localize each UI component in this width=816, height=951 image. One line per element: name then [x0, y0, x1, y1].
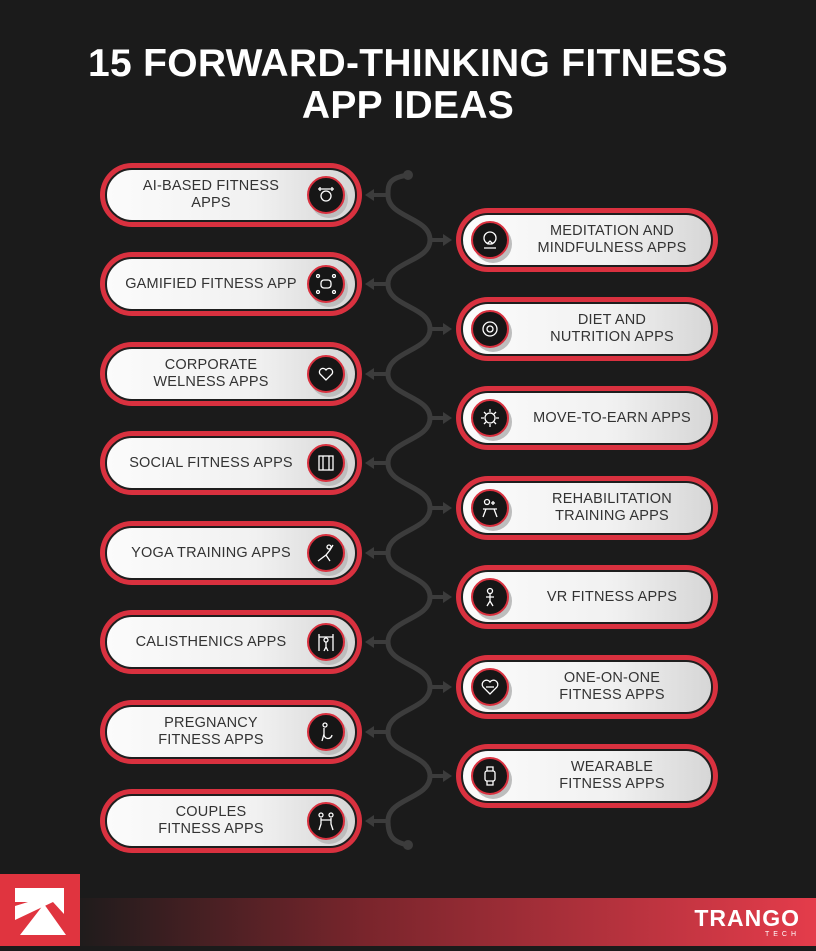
- pill: couples fitness apps: [100, 789, 362, 853]
- pill: corporate welness apps: CORPORATE: [165, 357, 257, 373]
- pill: rehabilitation training apps: [456, 476, 718, 540]
- pill: diet and nutrition apps: NUTRITION APPS: [550, 329, 674, 345]
- pill: couples fitness apps: COUPLES: [176, 804, 246, 820]
- pill: AI-based fitness apps: APPS: [191, 195, 231, 211]
- pill: rehabilitation training apps: TRAINING APPS: [555, 508, 669, 524]
- pill: social fitness apps: SOCIAL FITNESS APPS: [129, 454, 293, 470]
- pill: AI-based fitness apps: [100, 163, 362, 227]
- pill: wearable fitness apps: WEARABLE: [571, 759, 653, 775]
- pill: yoga training apps: [100, 521, 362, 585]
- pill: VR fitness apps: VR FITNESS APPS: [547, 588, 677, 604]
- pill: pregnancy fitness apps: [100, 700, 362, 764]
- title: 15 FORWARD-THINKING FITNESS: [88, 42, 728, 85]
- pill: corporate welness apps: [100, 342, 362, 406]
- pill: calisthenics apps: [100, 610, 362, 674]
- pill: VR fitness apps: [456, 565, 718, 629]
- title: APP IDEAS: [302, 84, 514, 127]
- pill: diet and nutrition apps: DIET AND: [578, 312, 646, 328]
- title: [88, 42, 728, 127]
- pill: one-on-one fitness apps: [456, 655, 718, 719]
- pill: calisthenics apps: CALISTHENICS APPS: [136, 634, 286, 650]
- pill: corporate welness apps: WELNESS APPS: [153, 374, 269, 390]
- pill: AI-based fitness apps: AI-BASED FITNESS: [143, 178, 279, 194]
- pill: wearable fitness apps: [456, 744, 718, 808]
- footer gradient bar: [0, 898, 816, 946]
- pill: meditation and mindfulness apps: MEDITATION AND: [550, 223, 674, 239]
- pill: meditation and mindfulness apps: MINDFULNESS APPS: [537, 240, 687, 256]
- pill: rehabilitation training apps: REHABILITATION: [552, 491, 672, 507]
- pill: move-to-earn apps: [456, 386, 718, 450]
- footer brand: Trango Tech: TECH: [765, 931, 800, 938]
- pill: gamified fitness app: GAMIFIED FITNESS APP: [125, 276, 297, 292]
- pill: meditation and mindfulness apps: [456, 208, 718, 272]
- pill: pregnancy fitness apps: FITNESS APPS: [158, 732, 264, 748]
- pill: yoga training apps: YOGA TRAINING APPS: [131, 544, 291, 560]
- footer brand: Trango Tech: TRANGO: [694, 905, 800, 931]
- pill: diet and nutrition apps: [456, 297, 718, 361]
- pill: gamified fitness app: [100, 252, 362, 316]
- pill: one-on-one fitness apps: FITNESS APPS: [559, 687, 665, 703]
- pill: one-on-one fitness apps: ONE-ON-ONE: [564, 670, 660, 686]
- pill: pregnancy fitness apps: PREGNANCY: [164, 715, 258, 731]
- pill: move-to-earn apps: MOVE-TO-EARN APPS: [533, 410, 691, 426]
- pill: couples fitness apps: FITNESS APPS: [158, 821, 264, 837]
- pill: wearable fitness apps: FITNESS APPS: [559, 776, 665, 792]
- pill: social fitness apps: [100, 431, 362, 495]
- footer logo square: [0, 874, 80, 946]
